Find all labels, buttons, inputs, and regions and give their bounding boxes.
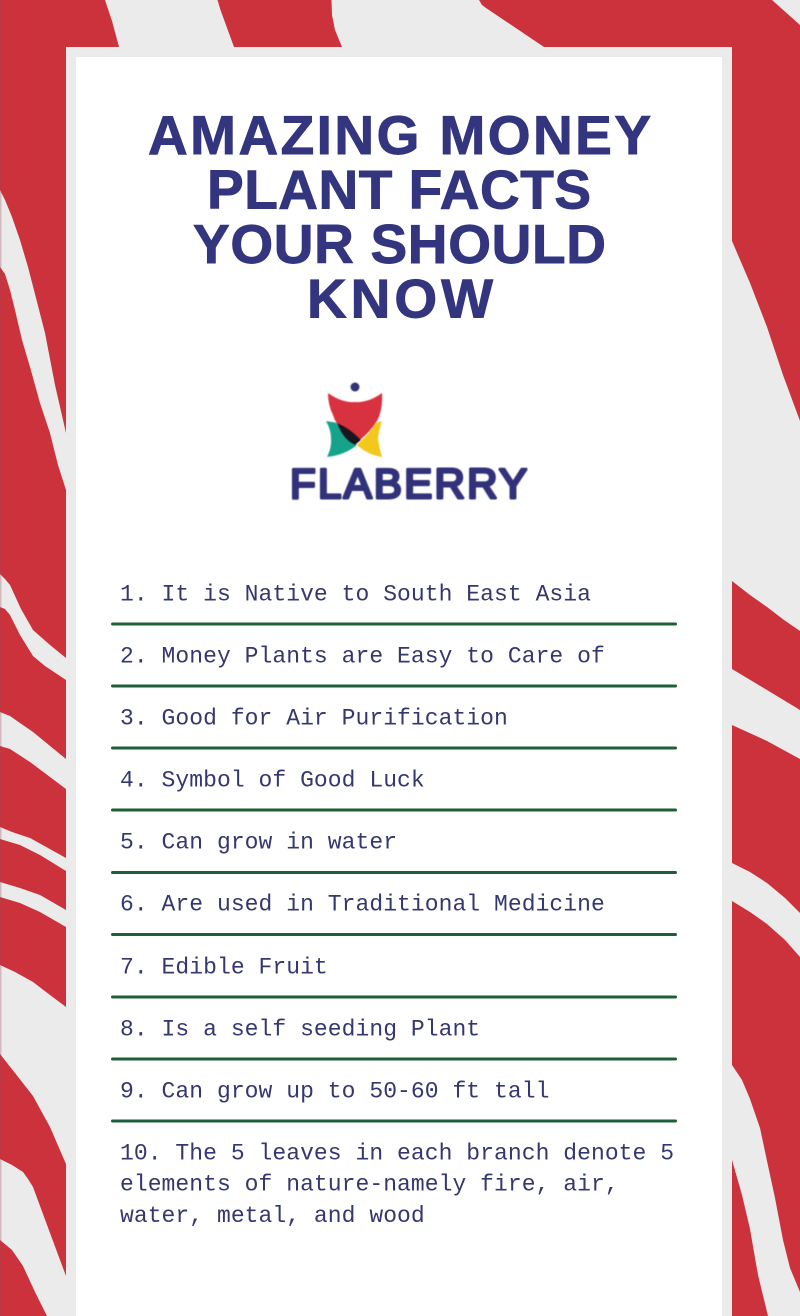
title: PLANT FACTS — [207, 158, 591, 220]
fact 2: 2. Money Plants are Easy to Care of — [120, 644, 605, 670]
fact 7 — [111, 954, 677, 998]
fact 10: 10. The 5 leaves in each branch denote 5 — [120, 1140, 674, 1166]
logo wordmark: FLABERRY — [290, 460, 527, 507]
fact 9: 9. Can grow up to 50-60 ft tall — [120, 1078, 549, 1104]
fact 9 — [111, 1078, 677, 1122]
fact 10: water, metal, and wood — [120, 1203, 425, 1229]
fact 5: 5. Can grow in water — [120, 830, 397, 856]
fact 1: 1. It is Native to South East Asia — [120, 582, 591, 608]
logo: Flaberry — [290, 382, 527, 507]
fact 8: 8. Is a self seeding Plant — [120, 1016, 480, 1042]
fact 8 — [111, 1016, 677, 1060]
title: AMAZING MONEY — [148, 104, 651, 166]
icon: logo flower mark — [326, 382, 382, 457]
fact 7: 7. Edible Fruit — [120, 954, 328, 980]
fact 4: 4. Symbol of Good Luck — [120, 768, 425, 794]
title — [148, 104, 651, 330]
fact 3 — [111, 706, 677, 750]
fact 2 — [111, 644, 677, 688]
panel: white card — [76, 57, 722, 1316]
fact 10 — [120, 1140, 674, 1229]
title: YOUR SHOULD — [193, 213, 606, 275]
facts list — [111, 582, 677, 1229]
fact 6: 6. Are used in Traditional Medicine — [120, 892, 605, 918]
title: KNOW — [307, 268, 493, 330]
fact 3: 3. Good for Air Purification — [120, 706, 508, 732]
fact 10: elements of nature-namely fire, air, — [120, 1172, 619, 1198]
fact 4 — [111, 768, 677, 812]
fact 6 — [111, 892, 677, 936]
fact 1 — [111, 582, 677, 626]
fact 5 — [111, 830, 677, 874]
